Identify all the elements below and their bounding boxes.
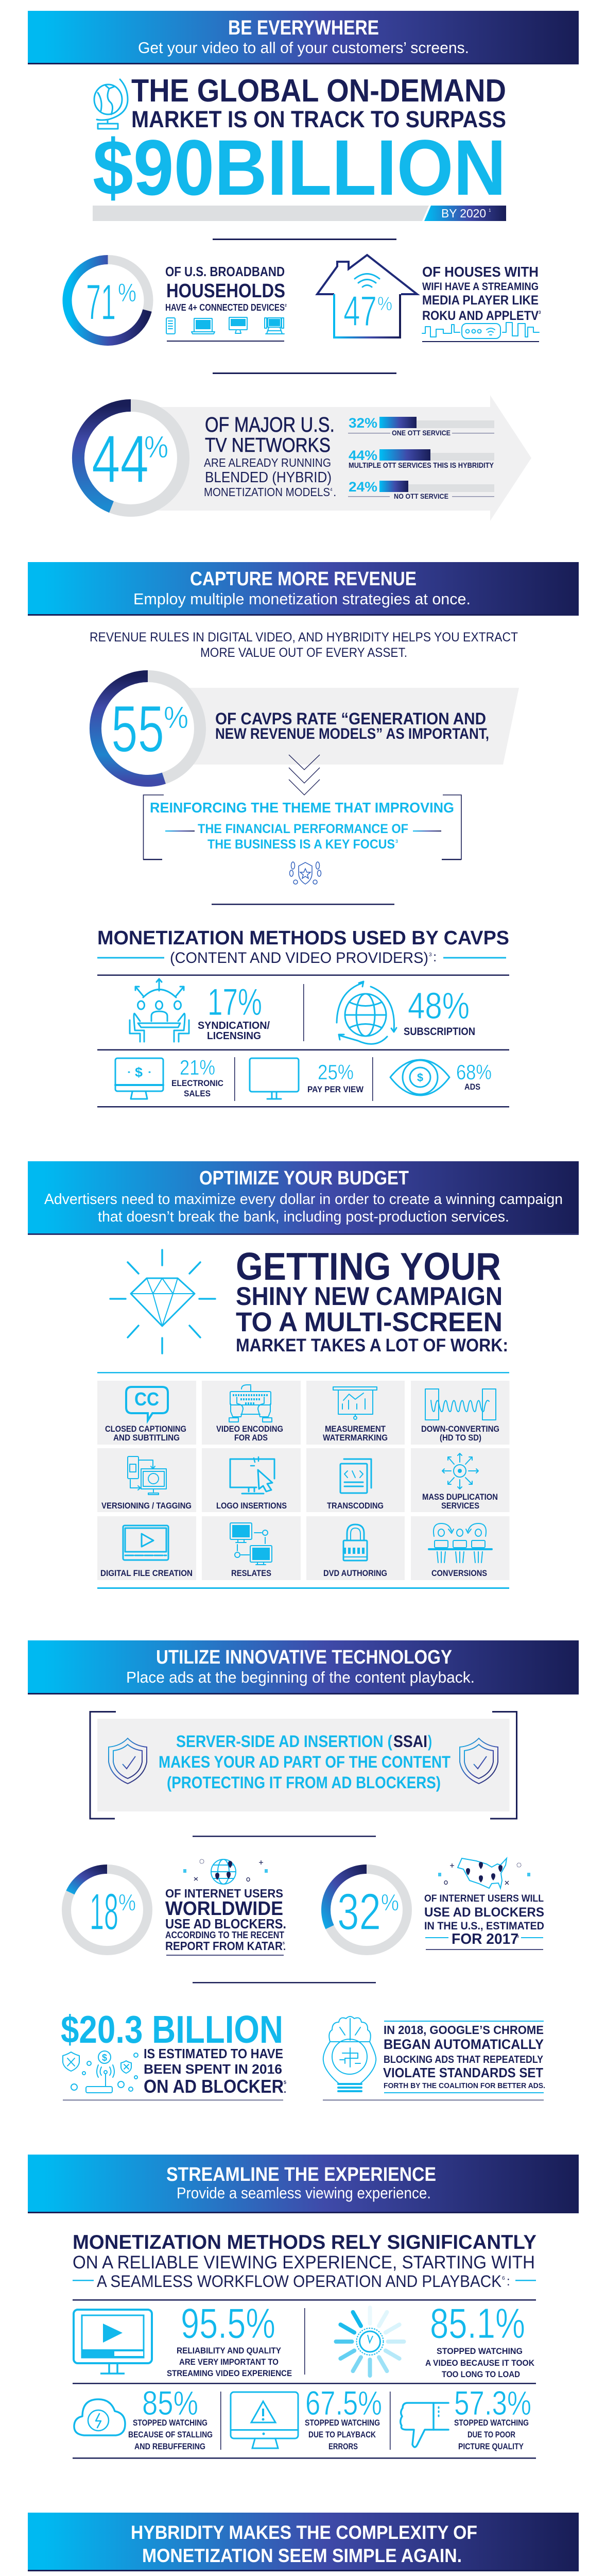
callout: reinforcing the theme	[143, 795, 461, 860]
text: major us tv networks: MONETIZATION MODELS	[204, 485, 330, 499]
text: major us tv networks: .	[333, 485, 336, 499]
bar: 44% multiple ott services: MULTIPLE OTT SERVICES THIS IS HYBRIDITY	[349, 461, 494, 470]
stat: 57.3% picture quality: DUE TO POOR	[468, 2430, 515, 2439]
text: major us tv networks: ARE ALREADY RUNNING	[204, 456, 331, 469]
text: estimated spent on ad blocker: BEEN SPENT IN 2016	[144, 2061, 282, 2077]
card: video encoding for ads: VIDEO ENCODING	[216, 1424, 283, 1434]
donut: 32%	[326, 1869, 407, 1951]
text: major us tv networks: OF MAJOR U.S.	[205, 413, 335, 436]
title: global on-demand market	[131, 73, 506, 132]
text: houses with wifi: WIFI HAVE A STREAMING	[422, 281, 539, 293]
text: ssai message: )	[428, 1732, 432, 1751]
icon: globe with rotating arrows	[337, 981, 396, 1044]
card: logo insertions: LOGO INSERTIONS	[216, 1501, 287, 1511]
text: estimated spent on ad blocker	[144, 2046, 286, 2097]
text: houses with wifi: OF HOUSES WITH	[422, 264, 539, 280]
card: conversions: CONVERSIONS	[431, 1568, 487, 1578]
icon: globe with pins	[183, 1859, 268, 1884]
icon: right shield	[460, 1738, 498, 1784]
stat: 68% ads	[456, 1060, 492, 1092]
stat: 67.5% playback errors: STOPPED WATCHING	[305, 2418, 380, 2428]
section header: optimize your budget: OPTIMIZE YOUR BUDGET	[199, 1167, 409, 1189]
icon: dollar in coin: $	[102, 2053, 107, 2063]
card: down-converting: DOWN-CONVERTING	[421, 1424, 499, 1434]
stat: 17% syndication: LICENSING	[207, 1030, 261, 1042]
text: estimated spent on ad blocker: .	[284, 2084, 286, 2095]
text: internet users worldwide: WORLDWIDE	[165, 1898, 283, 1920]
bar: 24% no ott service: 24%	[349, 479, 377, 495]
text: generation and new revenue models	[215, 709, 489, 742]
heading: getting your shiny new campaign: GETTING YOUR	[236, 1245, 501, 1288]
icon: house	[317, 255, 417, 337]
bar: by 2020: BY 2020	[441, 207, 486, 220]
stat: 48% subscription	[404, 986, 475, 1038]
donut: 55%	[95, 676, 200, 781]
text: ssai message: (PROTECTING IT FROM AD BLOCKERS)	[167, 1773, 441, 1792]
heading: monetization methods rely significantly: ON A RELIABLE VIEWING EXPERIENCE, STARTING WITH	[73, 2252, 535, 2273]
text: internet users worldwide: USE AD BLOCKERS.	[165, 1916, 286, 1931]
panel: services grid	[97, 1381, 510, 1580]
card: reslates	[202, 1516, 301, 1580]
donut: 32%: %	[381, 1889, 399, 1916]
card: mass duplication services	[411, 1448, 510, 1512]
text: internet users worldwide: OF INTERNET USERS	[165, 1887, 283, 1900]
text: google chrome blocking ads: BLOCKING ADS THAT REPEATEDLY	[384, 2054, 544, 2065]
icon: pay per view monitor	[250, 1058, 299, 1099]
text: broadband households: 2	[285, 304, 287, 308]
icon: left shield	[109, 1738, 147, 1784]
donut: 44%: %	[144, 430, 168, 464]
card: transcoding	[306, 1448, 405, 1512]
section header: optimize your budget: that doesn’t break the bank, including post-production services.	[98, 1209, 509, 1225]
card: digital file creation	[97, 1516, 196, 1580]
text: houses with wifi	[422, 264, 541, 323]
text: major us tv networks	[204, 413, 336, 499]
section header: capture more revenue: Employ multiple monetization strategies at once.	[133, 590, 471, 608]
section header: optimize your budget: Advertisers need to maximize every dollar in order to create a winning campaign	[44, 1191, 563, 1208]
text: internet users worldwide: 5	[283, 1942, 285, 1945]
section header: hybridity	[28, 2513, 579, 2571]
stat: 67.5% playback errors: DUE TO PLAYBACK	[308, 2430, 376, 2439]
stat: 85.1%: STOPPED WATCHING	[437, 2346, 523, 2356]
text: google chrome blocking ads	[383, 2021, 545, 2093]
card: closed captioning: CC	[134, 1388, 159, 1410]
section header: utilize innovative technology: UTILIZE INNOVATIVE TECHNOLOGY	[156, 1647, 452, 1668]
icon: eye dollar sign: $	[417, 1071, 423, 1084]
section header: utilize innovative technology	[28, 1640, 579, 1694]
text: houses with wifi: MEDIA PLAYER LIKE	[422, 293, 539, 308]
section header: hybridity: HYBRIDITY MAKES THE COMPLEXITY OF	[131, 2522, 477, 2543]
text: houses with wifi: 3	[539, 310, 541, 315]
bar chart: ott services	[348, 415, 494, 500]
stat: 48% subscription: 48%	[408, 986, 470, 1027]
section header: be everywhere	[28, 11, 579, 64]
bar: by 2020	[93, 206, 506, 221]
bar: 24% no ott service	[348, 479, 494, 500]
card: video encoding for ads	[202, 1381, 301, 1445]
card: closed captioning: AND SUBTITLING	[113, 1433, 180, 1443]
title: global on-demand market: THE GLOBAL ON-DEMAND	[131, 73, 506, 109]
panel: arrow with 44% of networks	[78, 395, 531, 521]
donut: 18%	[66, 1869, 148, 1951]
section header: streamline the experience	[28, 2155, 579, 2213]
text: ssai message	[159, 1732, 451, 1792]
icons: connected devices	[166, 317, 284, 334]
card: mass duplication services: SERVICES	[441, 1501, 479, 1511]
card: down-converting	[411, 1381, 510, 1445]
donut: 44%: 44	[92, 421, 149, 497]
text: broadband households: HOUSEHOLDS	[166, 280, 285, 302]
stat: 25% pay per view: PAY PER VIEW	[307, 1084, 364, 1094]
icon: wifi	[355, 274, 379, 287]
icon: loading clock	[336, 2308, 404, 2376]
callout: reinforcing the theme: THE FINANCIAL PERFORMANCE OF	[198, 822, 408, 836]
card: mass duplication services: MASS DUPLICATION	[422, 1492, 498, 1502]
text: google chrome blocking ads: VIOLATE STANDARDS SET	[383, 2065, 543, 2080]
text: internet users in the us: OF INTERNET USERS WILL	[424, 1893, 544, 1904]
heading: monetization methods rely significantly	[73, 2231, 536, 2291]
text: generation and new revenue models: OF CAVPS RATE “GENERATION AND	[215, 709, 486, 728]
arrow: chevrons down	[289, 755, 320, 795]
section header: be everywhere: Get your video to all of your customers’ screens.	[138, 39, 469, 57]
stat: 21% electronic sales: ELECTRONIC	[171, 1078, 223, 1088]
donut: 55%: 55	[111, 692, 164, 766]
bar: by 2020: 1	[489, 208, 491, 213]
stat: 57.3% picture quality: 57.3%	[454, 2384, 531, 2422]
icon: syndication meeting	[130, 979, 189, 1042]
stat: 85% stalling: AND REBUFFERING	[134, 2442, 205, 2451]
text: google chrome blocking ads: FORTH BY THE COALITION FOR BETTER ADS.	[384, 2081, 545, 2090]
text: revenue rules intro	[90, 630, 518, 660]
stat: 68% ads: 68%	[456, 1060, 492, 1084]
text: google chrome blocking ads: IN 2018, GOOGLE’S CHROME	[384, 2023, 544, 2037]
text: major us tv networks: BLENDED (HYBRID)	[205, 469, 332, 486]
icon: house: %	[377, 293, 392, 315]
text: major us tv networks: TV NETWORKS	[205, 434, 331, 456]
card: down-converting: (HD TO SD)	[440, 1433, 481, 1443]
icon: dollar sign: $	[135, 1064, 143, 1080]
stat: 95.5%	[167, 2299, 292, 2378]
card: versioning tagging: VERSIONING / TAGGING	[101, 1501, 192, 1511]
text: internet users worldwide: .	[283, 1942, 286, 1952]
heading: monetization methods rely significantly: 6	[502, 2276, 505, 2281]
stat: 25% pay per view: 25%	[318, 1060, 354, 1084]
stat: 85% stalling	[128, 2384, 213, 2451]
icon: globe	[94, 79, 128, 129]
text: internet users in the us: USE AD BLOCKERS	[424, 1905, 544, 1920]
icon: brain light bulb	[323, 2016, 376, 2091]
stat: 85.1%: A VIDEO BECAUSE IT TOOK	[425, 2358, 535, 2368]
stat: 25% pay per view	[307, 1060, 364, 1094]
card: dvd authoring: DVD AUTHORING	[323, 1568, 387, 1578]
stat: 67.5% playback errors: ERRORS	[328, 2442, 358, 2451]
bar: 32% one ott service	[348, 415, 494, 437]
text: google chrome blocking ads: BEGAN AUTOMATICALLY	[384, 2037, 544, 2052]
heading: monetization methods rely significantly: MONETIZATION METHODS RELY SIGNIFICANTLY	[73, 2231, 536, 2253]
stat: 68% ads: ADS	[464, 1082, 480, 1092]
stat: 48% subscription: SUBSCRIPTION	[404, 1026, 475, 1038]
heading: monetization methods used by cavps: 3	[429, 952, 432, 958]
icon: monitor with warning	[230, 2392, 299, 2448]
card: reslates: RESLATES	[231, 1568, 271, 1578]
icon: video player monitor	[74, 2310, 152, 2374]
callout: reinforcing the theme: REINFORCING THE THEME THAT IMPROVING	[150, 800, 454, 816]
card: transcoding: TRANSCODING	[327, 1501, 384, 1511]
icon: cloud buffering	[74, 2399, 125, 2435]
icon: thumbs down	[401, 2403, 448, 2447]
icon: us map with pins	[438, 1858, 530, 1888]
callout: server-side ad insertion	[90, 1711, 517, 1819]
bar: 24% no ott service: NO OTT SERVICE	[394, 492, 448, 500]
card: conversions	[411, 1516, 510, 1580]
card: versioning tagging	[97, 1448, 196, 1512]
stat: 67.5% playback errors	[305, 2384, 382, 2451]
stat: 85% stalling: STOPPED WATCHING	[133, 2418, 207, 2428]
text: broadband households: OF U.S. BROADBAND	[165, 264, 285, 279]
stat: 95.5%: ARE VERY IMPORTANT TO	[179, 2357, 279, 2367]
text: estimated spent on ad blocker: IS ESTIMATED TO HAVE	[144, 2046, 283, 2061]
donut: 44%	[78, 405, 183, 511]
card: dvd authoring	[306, 1516, 405, 1580]
stat: 95.5%: 95.5%	[181, 2299, 275, 2347]
icon: shining diamond	[110, 1250, 215, 1353]
icons: shields, coins and router	[63, 2051, 138, 2093]
bar: 44% multiple ott services: 44%	[349, 448, 377, 463]
bar: 44% multiple ott services	[349, 448, 494, 470]
stat: 57.3% picture quality: STOPPED WATCHING	[454, 2418, 529, 2428]
stat: 95.5%: STREAMING VIDEO EXPERIENCE	[167, 2368, 292, 2378]
heading: monetization methods rely significantly: :	[507, 2275, 510, 2289]
section header: optimize your budget	[28, 1161, 579, 1235]
stat: 17% syndication: SYNDICATION/	[198, 1020, 270, 1031]
card: measurement watermarking: WATERMARKING	[323, 1433, 388, 1443]
text: estimated spent on ad blocker: 5	[284, 2080, 286, 2085]
text: revenue rules intro: REVENUE RULES IN DIGITAL VIDEO, AND HYBRIDITY HELPS YOU EXTRACT	[90, 630, 518, 645]
stat: 21% electronic sales	[171, 1056, 223, 1098]
heading: getting your shiny new campaign: TO A MULTI-SCREEN	[236, 1307, 503, 1337]
stat: 85.1%	[425, 2299, 535, 2379]
bar: 32% one ott service: ONE OTT SERVICE	[392, 429, 451, 437]
stat: 85% stalling: BECAUSE OF STALLING	[128, 2430, 213, 2439]
donut: 32%: 32	[337, 1883, 381, 1941]
text: houses with wifi: ROKU AND APPLETV	[422, 309, 539, 323]
stat: 85% stalling: 85%	[142, 2384, 198, 2422]
section header: utilize innovative technology: Place ads at the beginning of the content playback.	[126, 1668, 475, 1686]
section header: streamline the experience: STREAMLINE THE EXPERIENCE	[166, 2164, 436, 2185]
card: closed captioning: CLOSED CAPTIONING	[105, 1424, 186, 1434]
section header: capture more revenue: CAPTURE MORE REVENUE	[190, 568, 417, 590]
text: revenue rules intro: MORE VALUE OUT OF EVERY ASSET.	[200, 646, 407, 660]
donut: 71%: %	[118, 278, 136, 307]
card: measurement watermarking: MEASUREMENT	[325, 1424, 386, 1434]
stat: $20.3 billion: $20.3 BILLION	[61, 2008, 283, 2051]
bar: 32% one ott service: 32%	[349, 415, 377, 431]
stat: 95.5%: RELIABILITY AND QUALITY	[177, 2346, 282, 2355]
panel: 55% cavps	[95, 676, 519, 781]
donut: 55%: %	[164, 700, 188, 735]
stat: 57.3% picture quality: PICTURE QUALITY	[458, 2442, 524, 2451]
section header: streamline the experience: Provide a seamless viewing experience.	[177, 2184, 431, 2202]
icon: eye with dollar	[390, 1060, 449, 1095]
callout: reinforcing the theme: 3	[395, 839, 398, 844]
heading: getting your shiny new campaign: MARKET TAKES A LOT OF WORK:	[236, 1335, 508, 1355]
stat: 57.3% picture quality	[454, 2384, 531, 2451]
stat: 21% electronic sales: SALES	[184, 1089, 211, 1098]
text: internet users in the us: IN THE U.S., ESTIMATED	[424, 1920, 544, 1932]
card: logo insertions	[202, 1448, 301, 1512]
text: estimated spent on ad blocker: ON AD BLOCKER	[144, 2076, 284, 2097]
text: internet users worldwide: ACCORDING TO THE RECENT	[165, 1930, 284, 1940]
donut: 71%	[67, 260, 148, 341]
text: ssai message: MAKES YOUR AD PART OF THE CONTENT	[159, 1753, 451, 1771]
heading: getting your shiny new campaign: SHINY NEW CAMPAIGN	[236, 1282, 503, 1311]
text: internet users in the us: FOR 2017	[452, 1931, 518, 1947]
stat: 17% syndication: 17%	[207, 981, 262, 1023]
card: closed captioning	[97, 1381, 196, 1445]
stat: 67.5% playback errors: 67.5%	[305, 2384, 382, 2422]
section header: hybridity: MONETIZATION SEEM SIMPLE AGAIN.	[142, 2545, 462, 2566]
text: internet users worldwide	[165, 1887, 286, 1953]
section header: capture more revenue	[28, 562, 579, 616]
big number: $90 billion: $90BILLION	[93, 124, 506, 212]
icon: monitor with dollar	[115, 1058, 163, 1099]
card: digital file creation: DIGITAL FILE CREATION	[100, 1568, 193, 1578]
text: internet users in the us	[424, 1893, 544, 1947]
text: generation and new revenue models: NEW REVENUE MODELS” AS IMPORTANT,	[215, 725, 489, 742]
stat: 85.1%: TOO LONG TO LOAD	[442, 2369, 520, 2379]
stat: 17% syndication	[198, 981, 270, 1042]
heading: monetization methods used by cavps	[97, 927, 509, 967]
text: major us tv networks: 4	[330, 487, 333, 492]
icon: house: 47	[343, 287, 377, 335]
callout: reinforcing the theme: THE BUSINESS IS A KEY FOCUS	[207, 837, 395, 852]
donut: 18%: %	[118, 1889, 136, 1916]
heading: monetization methods used by cavps: :	[433, 949, 437, 964]
text: ssai message: SSAI	[393, 1732, 427, 1751]
text: broadband households: HAVE 4+ CONNECTED DEVICES	[165, 302, 285, 313]
icon: router with signal waves	[422, 323, 539, 338]
card: video encoding for ads: FOR ADS	[234, 1433, 268, 1443]
icon: shield with laurel	[289, 862, 321, 884]
text: internet users worldwide: REPORT FROM KATAR	[165, 1939, 283, 1953]
section header: be everywhere: BE EVERYWHERE	[228, 16, 379, 39]
heading: monetization methods rely significantly: A SEAMLESS WORKFLOW OPERATION AND PLAYBACK	[97, 2272, 501, 2291]
text: internet users in the us: 5	[517, 1935, 519, 1939]
text: broadband households	[165, 264, 287, 313]
heading: getting your shiny new campaign	[236, 1245, 508, 1355]
card: measurement watermarking	[306, 1381, 405, 1445]
heading: monetization methods used by cavps: MONETIZATION METHODS USED BY CAVPS	[97, 927, 509, 949]
donut: 18%: 18	[90, 1883, 118, 1941]
stat: 85.1%: 85.1%	[430, 2299, 525, 2347]
donut: 71%: 71	[86, 274, 116, 330]
text: ssai message: SERVER-SIDE AD INSERTION (	[176, 1732, 392, 1751]
stat: 21% electronic sales: 21%	[180, 1056, 215, 1079]
heading: monetization methods used by cavps: (CONTENT AND VIDEO PROVIDERS)	[170, 950, 428, 967]
title: global on-demand market: MARKET IS ON TRACK TO SURPASS	[131, 106, 506, 132]
